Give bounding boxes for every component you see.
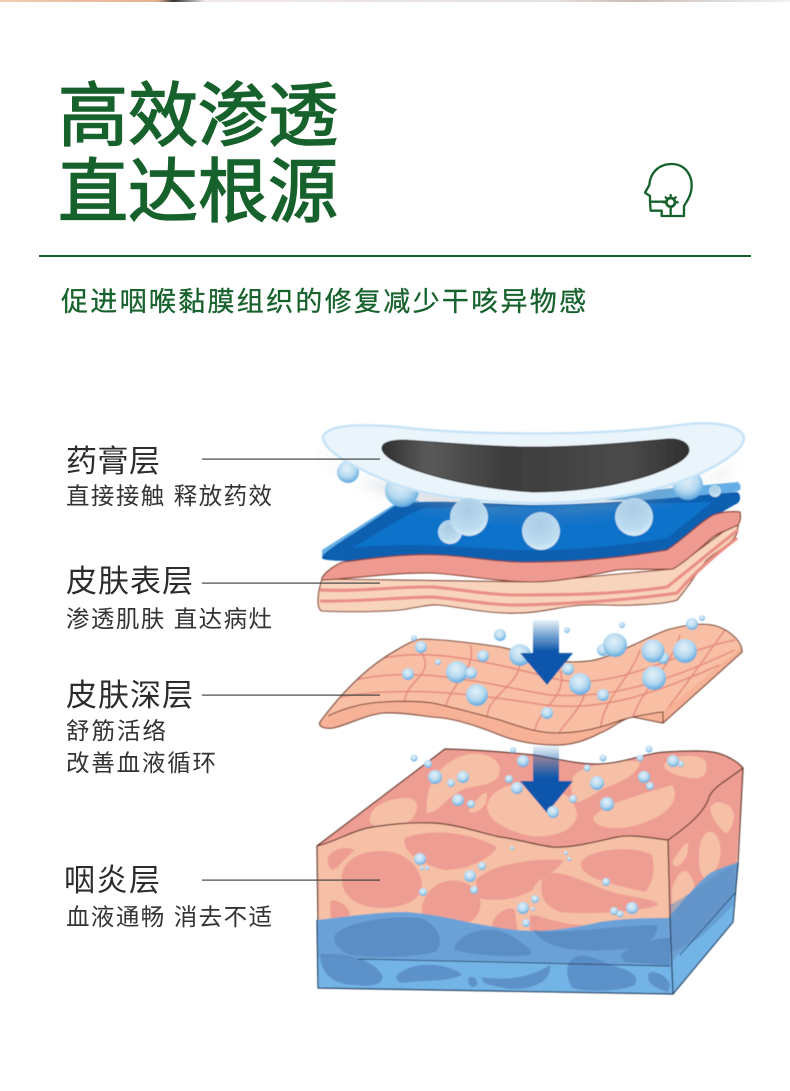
epidermis stripes	[320, 530, 738, 605]
front face dark patches	[328, 832, 658, 935]
label: patch layer	[66, 444, 380, 509]
top face light patches	[370, 754, 707, 836]
label: dermis: 改善血液循环	[66, 750, 216, 776]
gel bubbles	[438, 485, 721, 550]
epidermis top	[322, 512, 740, 582]
dermis sheet	[320, 624, 742, 745]
diagram: patch layer	[320, 423, 748, 515]
label: epidermis: 皮肤表层	[66, 564, 193, 599]
arrow: down to block	[520, 746, 573, 813]
dark gel sheet	[322, 492, 740, 562]
darker blue blobs	[320, 865, 735, 992]
diagram: layered skin illustration	[317, 423, 748, 994]
block bubbles	[410, 746, 684, 927]
title	[58, 77, 338, 231]
divider	[39, 255, 751, 257]
label: dermis: 舒筋活络	[66, 718, 166, 744]
label: pharyngitis layer: 咽炎层	[64, 863, 160, 898]
lower bright blue band	[317, 892, 736, 994]
diagram: dermis layer	[320, 624, 742, 745]
title: 直达根源	[58, 153, 338, 231]
label: dermis	[66, 678, 380, 776]
diagram: throat tissue block	[317, 749, 743, 994]
light gel edge	[322, 482, 741, 560]
side face light patches	[672, 802, 734, 915]
dermis bubbles	[402, 615, 705, 719]
diagram: epidermis layer	[318, 512, 740, 613]
label: pharyngitis layer: 血液通畅 消去不适	[66, 904, 272, 930]
icon: head with throat	[645, 164, 692, 216]
diagram: blue gel layer	[322, 482, 741, 562]
subtitle: 促进咽喉黏膜组织的修复减少干咳异物感	[61, 287, 588, 317]
dermis outline	[320, 624, 742, 745]
bubbles behind patch	[337, 461, 703, 507]
blue tissue side	[668, 862, 739, 994]
medicine pad	[382, 439, 689, 492]
bubble behind arrow head	[509, 644, 531, 666]
patch backing	[323, 423, 744, 503]
block side face	[668, 768, 743, 994]
title: 高效渗透	[58, 77, 338, 155]
label: pharyngitis layer	[64, 863, 380, 930]
label: patch layer: 药膏层	[66, 444, 160, 479]
block outlines	[317, 749, 743, 920]
label: epidermis: 渗透肌肤 直达病灶	[66, 606, 272, 632]
label: patch layer: 直接接触 释放药效	[66, 483, 272, 509]
blue tissue front	[317, 912, 673, 994]
dermis front edge	[320, 647, 742, 745]
label: dermis: 皮肤深层	[66, 678, 193, 713]
epidermis body	[318, 520, 739, 613]
block front face	[317, 823, 673, 994]
label: epidermis	[66, 564, 380, 632]
top edge strip	[0, 0, 790, 2]
patch shadow	[320, 450, 748, 515]
arrow: down to dermis	[520, 620, 573, 685]
block top face	[317, 749, 743, 847]
dermis grid	[340, 630, 735, 745]
